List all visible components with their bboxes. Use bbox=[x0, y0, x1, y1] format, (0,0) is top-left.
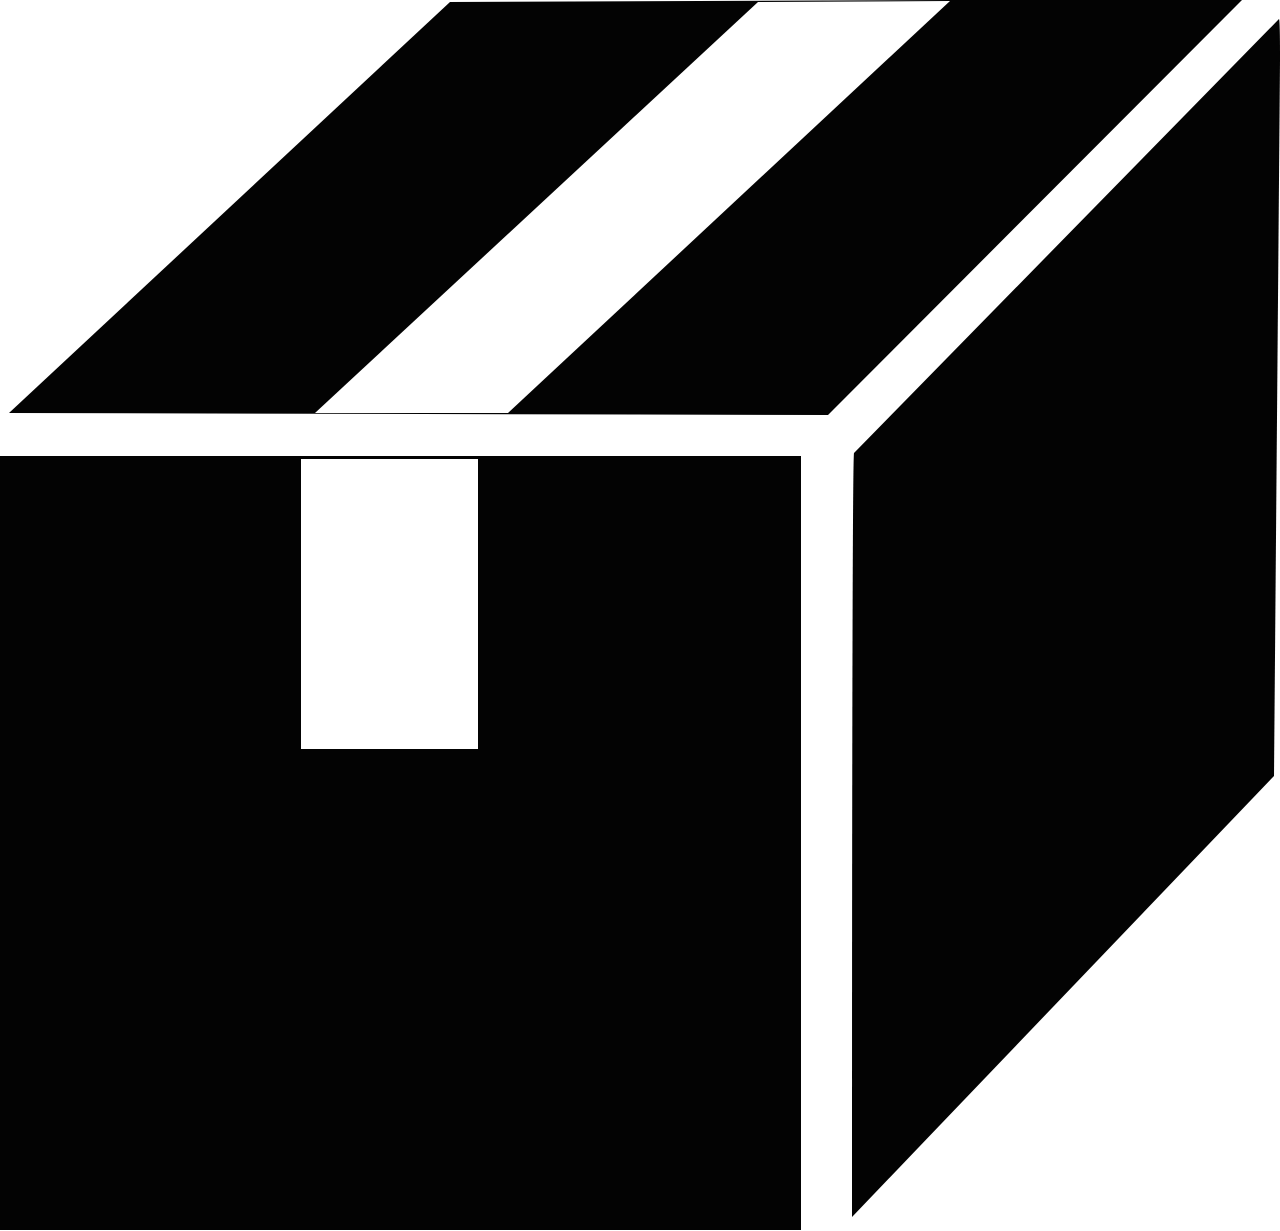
top tape strip bbox=[315, 1, 950, 413]
front tape strip bbox=[301, 459, 478, 749]
box top face bbox=[9, 0, 1242, 415]
box front face bbox=[0, 456, 801, 1230]
top face flaps bbox=[9, 0, 1242, 415]
front panel bbox=[0, 456, 801, 1230]
box right side face bbox=[852, 19, 1280, 1217]
